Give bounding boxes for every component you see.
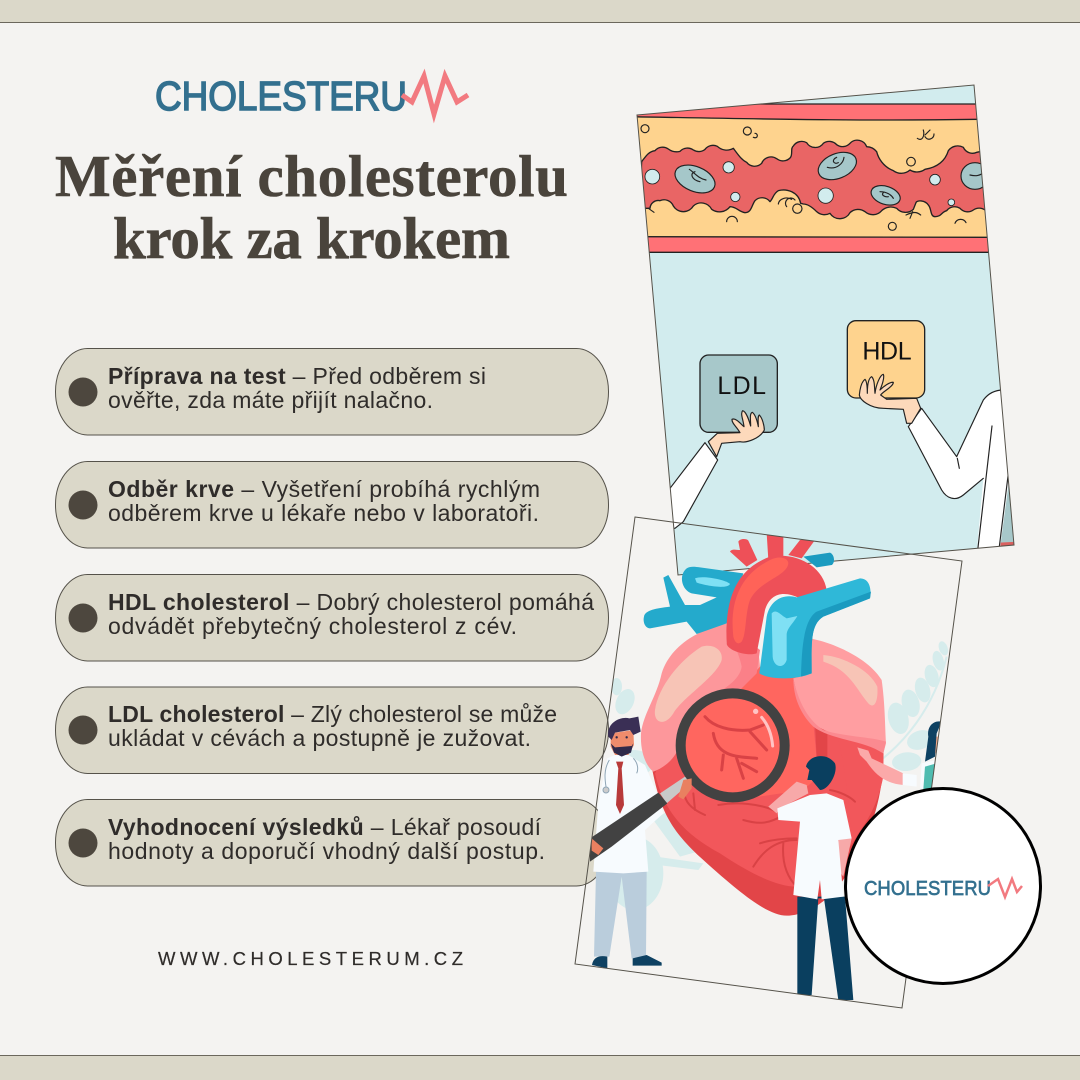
- panel: step 5: hodnoty a doporučí vhodný další postup.: [108, 838, 545, 864]
- card: LDL: [700, 355, 777, 432]
- coronary veins: [685, 790, 855, 887]
- left atrium: [641, 623, 760, 772]
- plaque curls: [753, 130, 934, 139]
- illustration: artery and LDL/HDL cards: LDL: [717, 372, 766, 400]
- panel: step 3: odvádět přebytečný cholesterol z cév.: [108, 613, 517, 639]
- bottom band: [0, 1056, 1080, 1080]
- artery wall: [630, 104, 997, 252]
- badge: logo circle: [846, 788, 1040, 984]
- title: krok za krokem: [113, 205, 510, 271]
- panel: step 5: Vyhodnocení výsledků – Lékař posoudí: [108, 814, 542, 840]
- front doctor: [797, 897, 853, 1000]
- panel: step 1: Příprava na test – Před odběrem si: [108, 363, 486, 389]
- left doctor tie: [616, 762, 624, 814]
- panel: step 4: [56, 687, 608, 774]
- blood vessel lumen: [640, 140, 997, 219]
- panel: step 1: [56, 348, 608, 435]
- red blood cells: [671, 147, 989, 209]
- website url: WWW.CHOLESTERUM.CZ: [158, 948, 463, 969]
- top branches: [730, 539, 757, 567]
- plaque layer: [630, 117, 997, 237]
- plasma bubbles: [645, 162, 955, 206]
- panel: step 4: ukládat v cévách a postupně je zužovat.: [108, 725, 531, 751]
- title: [55, 143, 568, 271]
- panel: step 1: ověřte, zda máte přijít nalačno.: [108, 387, 433, 413]
- aorta: [726, 556, 827, 654]
- illustration: heart with doctors: [575, 517, 962, 1008]
- magnifier handle: [660, 776, 687, 803]
- right small doctor: [857, 747, 903, 785]
- hands: [708, 411, 764, 457]
- illustration: artery and LDL/HDL cards: HDL: [862, 337, 912, 365]
- left doctor coat: [593, 755, 663, 873]
- heart base: [652, 752, 884, 916]
- leaves background: [607, 640, 950, 910]
- right blue vessel: [759, 578, 871, 678]
- panel: step 3: HDL cholesterol – Dobrý cholesterol pomáhá: [108, 589, 594, 615]
- logo: Cholesterum: CHOLESTERU: [155, 74, 407, 119]
- left doctor head: [611, 730, 634, 755]
- left blue vessels: [644, 567, 743, 634]
- left doctor legs: [594, 872, 647, 958]
- panel: step 4: LDL cholesterol – Zlý cholesterol se může: [108, 701, 557, 727]
- panel: step 5: [56, 800, 608, 886]
- badge: logo circle: CHOLESTERU: [864, 877, 991, 900]
- magnifier handle dark: [590, 793, 667, 862]
- panel: step 3: [56, 574, 608, 661]
- panel: step 2: [56, 462, 608, 548]
- magnifier: [681, 693, 785, 797]
- top band: [0, 0, 1080, 22]
- title: Měření cholesterolu: [55, 143, 568, 209]
- illustration: artery and LDL/HDL cards: [630, 85, 1017, 575]
- panel: step 2: odběrem krve u lékaře nebo v laboratoři.: [108, 500, 539, 526]
- panel: step 2: Odběr krve – Vyšetření probíhá rychlým: [108, 476, 540, 502]
- right atrium: [793, 638, 886, 753]
- card: HDL: [847, 321, 925, 398]
- coat and background corner: [1000, 486, 1014, 542]
